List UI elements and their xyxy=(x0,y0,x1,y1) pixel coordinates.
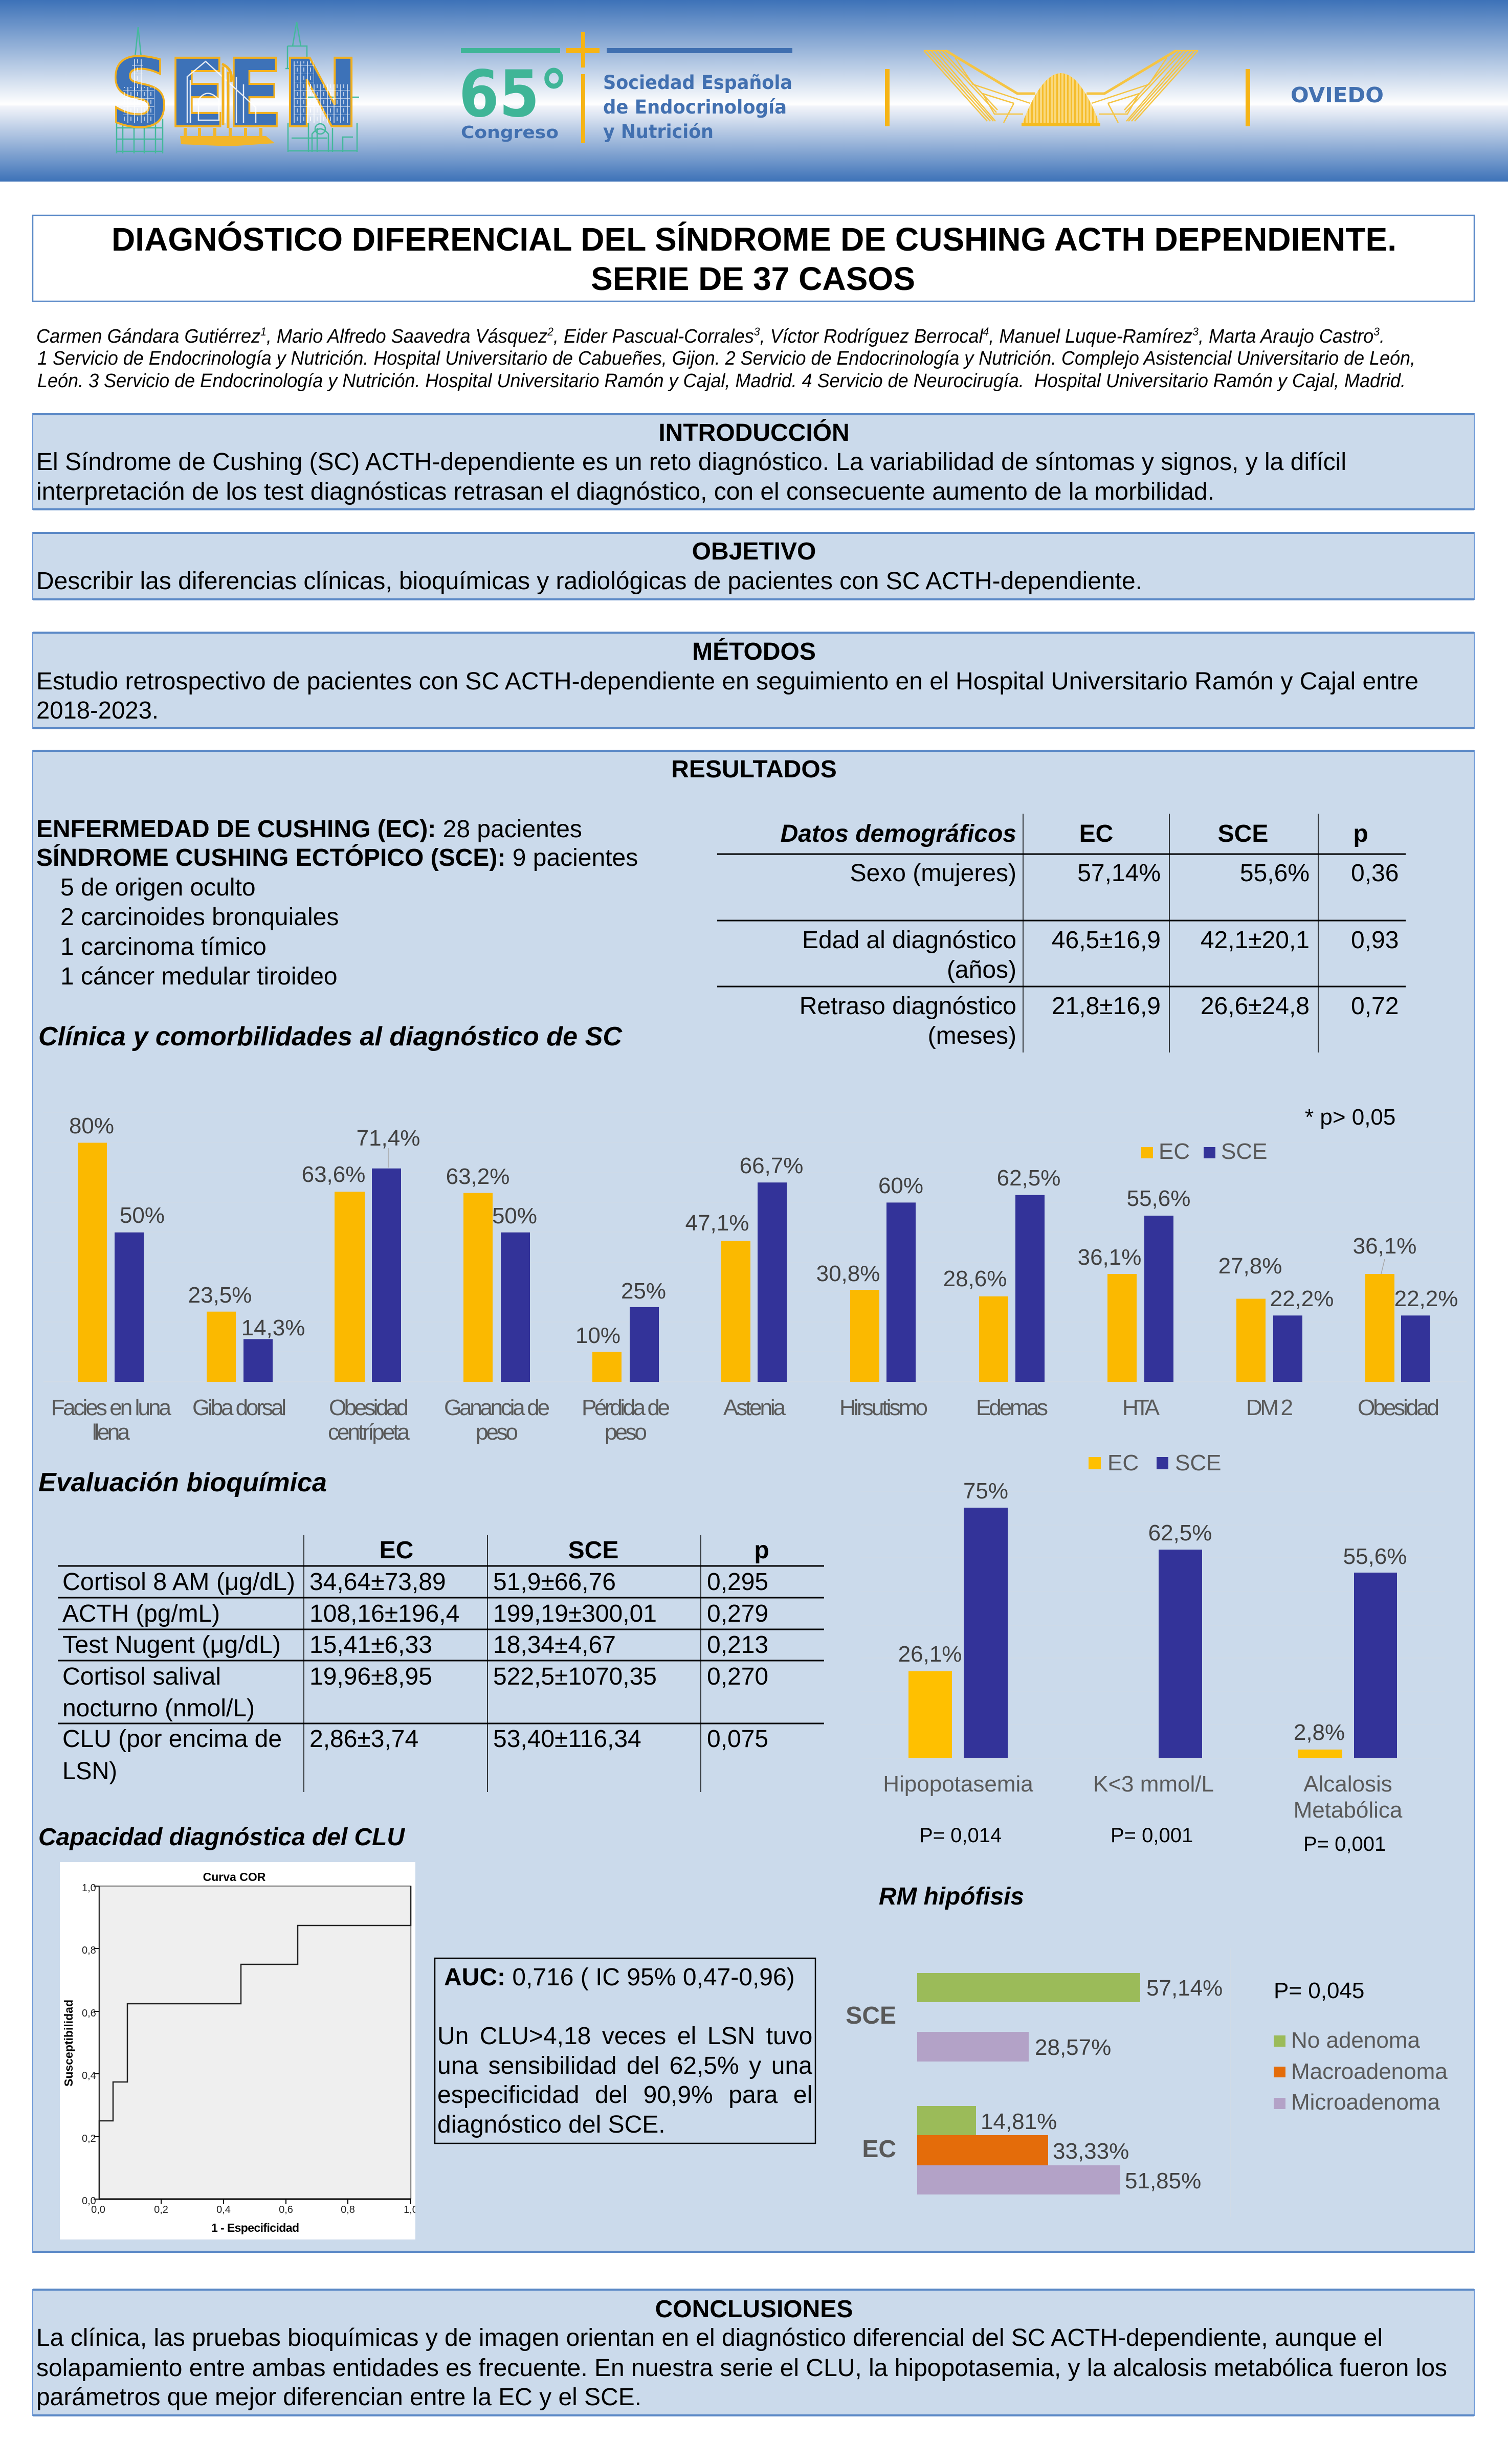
data labels: 27,8% xyxy=(1218,1253,1282,1279)
text block: patient groups: 1 carcinoma tímico xyxy=(60,933,267,960)
table: evaluación bioquímica: ACTH (pg/mL) xyxy=(62,1600,220,1627)
table: datos demográficos: 0,72 xyxy=(1351,993,1399,1020)
bar chart: RM hipófisis: 33,33% xyxy=(1053,2139,1129,2164)
bar chart: RM hipófisis: 51,85% xyxy=(1125,2168,1201,2193)
panel: conclusiones: CONCLUSIONES xyxy=(655,2296,853,2323)
table: evaluación bioquímica: p xyxy=(754,1537,769,1564)
title box: SERIE DE 37 CASOS xyxy=(591,260,915,297)
data labels: 25% xyxy=(621,1279,666,1304)
table: evaluación bioquímica: SCE xyxy=(568,1537,618,1564)
category labels: Facies en luna xyxy=(51,1395,172,1420)
authors and affiliations: , Manuel Luque-Ramírez xyxy=(989,326,1192,347)
p values: P= 0,001 xyxy=(1303,1833,1386,1855)
heading: RM hipófisis: RM hipófisis xyxy=(879,1883,1024,1910)
category labels: Hirsutismo xyxy=(839,1395,928,1420)
table: datos demográficos: 26,6±24,8 xyxy=(1201,993,1310,1020)
table: datos demográficos: 57,14% xyxy=(1077,860,1161,887)
panel: métodos xyxy=(33,632,1474,729)
panel: métodos: 2018-2023. xyxy=(36,697,159,724)
table: evaluación bioquímica: 2,86±3,74 xyxy=(309,1726,418,1753)
data labels: 10% xyxy=(575,1323,620,1348)
panel: métodos: MÉTODOS xyxy=(692,638,816,665)
authors and affiliations: 2 xyxy=(547,325,553,338)
logo: Oviedo bridge xyxy=(885,51,1250,126)
table: evaluación bioquímica: 19,96±8,95 xyxy=(309,1663,432,1690)
chart: curva COR xyxy=(60,1862,418,2239)
authors and affiliations: Carmen Gándara Gutiérrez xyxy=(36,326,272,347)
table: evaluación bioquímica: 15,41±6,33 xyxy=(309,1631,432,1659)
table: datos demográficos: 46,5±16,9 xyxy=(1052,927,1161,954)
callout: AUC: especificidad del 90,9% para el xyxy=(437,2081,812,2109)
text block: patient groups: 2 carcinoides bronquiales xyxy=(60,904,339,931)
data labels: 55,6% xyxy=(1343,1544,1407,1569)
logo: 65 congreso: Sociedad Española xyxy=(603,72,792,94)
panel: introducción: interpretación de los test diagnósticas retrasan el diagnóstico, con el consecuente aumento de la morbilidad. xyxy=(36,478,1214,505)
panel: conclusiones: solapamiento entre ambas entidades es frecuente. En nuestra serie el CLU, la hipopotasemia, y la alcalosis metabólica fueron los xyxy=(36,2355,1447,2382)
category labels: Alcalosis xyxy=(1303,1772,1392,1797)
data labels: 63,2% xyxy=(446,1164,509,1189)
data labels: 62,5% xyxy=(1148,1520,1212,1545)
logo: 65 congreso xyxy=(459,32,792,143)
category labels xyxy=(883,1772,1403,1823)
text block: patient groups: SÍNDROME CUSHING ECTÓPICO (SCE): 9 pacientes xyxy=(36,843,638,871)
legend: RM: No adenoma xyxy=(1291,2028,1420,2053)
category labels: Astenia xyxy=(723,1395,786,1420)
panel: conclusiones: La clínica, las pruebas bioquímicas y de imagen orientan en el diagnóstico diferencial del SC ACTH-dependiente, aunque el xyxy=(36,2324,1383,2351)
authors and affiliations: , Eider Pascual-Corrales xyxy=(553,326,754,347)
callout: AUC: Un CLU>4,18 veces el LSN tuvo xyxy=(437,2023,812,2050)
table: evaluación bioquímica: Cortisol salival xyxy=(62,1663,221,1690)
chart: curva COR: 0,6 xyxy=(279,2204,293,2215)
data labels: 26,1% xyxy=(898,1642,962,1667)
bar chart: RM hipófisis: 57,14% xyxy=(1146,1976,1223,2001)
table: datos demográficos: EC xyxy=(1079,820,1113,847)
header banner xyxy=(0,0,1508,182)
bar chart: RM hipófisis: SCE xyxy=(846,2002,896,2029)
table: evaluación bioquímica: nocturno (nmol/L) xyxy=(62,1695,255,1722)
panel: objetivo xyxy=(33,532,1474,600)
text block: patient groups: ENFERMEDAD DE CUSHING (EC): 28 pacientes xyxy=(36,816,582,843)
chart: curva COR: Curva COR xyxy=(203,1870,266,1884)
legend: chart 2: SCE xyxy=(1175,1450,1221,1475)
authors and affiliations: 1 Servicio de Endocrinología y Nutrición. Hospital Universitario de Cabueñes, Gijon. 2 Servicio de Endocrinología y Nutrición. Complejo Asistencial Universitario de León, xyxy=(37,348,1415,369)
bar chart: RM hipófisis: 28,57% xyxy=(1035,2035,1111,2060)
data labels: 22,2% xyxy=(1270,1286,1334,1311)
title box xyxy=(33,215,1474,301)
logo: SEEN with Oviedo buildings: E xyxy=(226,39,283,149)
panel: conclusiones xyxy=(33,2289,1474,2416)
table: evaluación bioquímica: CLU (por encima de xyxy=(62,1726,282,1753)
category labels: DM 2 xyxy=(1246,1395,1293,1420)
data labels: 62,5% xyxy=(997,1166,1060,1191)
bar chart: RM hipófisis: EC xyxy=(862,2136,896,2163)
category labels: llena xyxy=(92,1420,130,1445)
table: evaluación bioquímica: Test Nugent (μg/dL) xyxy=(62,1631,281,1659)
logo: SEEN with Oviedo buildings: S xyxy=(109,39,170,148)
data labels: 50% xyxy=(492,1203,537,1228)
category labels: HTA xyxy=(1122,1395,1160,1420)
authors and affiliations: 3 xyxy=(1192,325,1199,338)
chart: curva COR: 0,6 xyxy=(82,2008,96,2019)
data labels xyxy=(69,1113,1458,1348)
table: evaluación bioquímica: 0,213 xyxy=(707,1631,768,1659)
table: datos demográficos: (años) xyxy=(947,956,1016,983)
ROC curve xyxy=(99,1886,411,2199)
data labels: 55,6% xyxy=(1127,1186,1190,1211)
data labels: 28,6% xyxy=(943,1266,1007,1291)
data labels: 75% xyxy=(963,1479,1008,1504)
bars: EC xyxy=(908,1671,1342,1758)
logo: 65 congreso: 65° xyxy=(459,56,568,131)
legend: RM: Microadenoma xyxy=(1291,2090,1440,2115)
bar chart: RM hipófisis xyxy=(846,1948,1231,2217)
data labels: 23,5% xyxy=(188,1283,252,1308)
heading: capacidad diagnóstica: Capacidad diagnóstica del CLU xyxy=(38,1824,405,1851)
logo: OVIEDO: OVIEDO xyxy=(1291,83,1384,107)
table: evaluación bioquímica: 53,40±116,34 xyxy=(493,1726,641,1753)
category labels: Edemas xyxy=(976,1395,1048,1420)
chart: curva COR: 1,0 xyxy=(82,1883,96,1894)
text block: patient groups: 1 cáncer medular tiroideo xyxy=(60,963,338,990)
authors and affiliations: 1 xyxy=(260,325,267,338)
chart: curva COR: 0,0 xyxy=(91,2204,105,2215)
bar chart: alteraciones bioquímicas xyxy=(860,1450,1445,1855)
category labels: Ganancia de xyxy=(444,1395,550,1420)
table: datos demográficos: Sexo (mujeres) xyxy=(850,860,1016,887)
chart: curva COR: 0,2 xyxy=(154,2204,168,2215)
authors and affiliations: 3 xyxy=(754,325,760,338)
logo: SEEN with Oviedo buildings xyxy=(109,22,360,153)
authors and affiliations: , Mario Alfredo Saavedra Vásquez xyxy=(267,326,547,347)
bar chart: RM hipófisis: 14,81% xyxy=(981,2109,1057,2134)
table: evaluación bioquímica: 18,34±4,67 xyxy=(493,1631,616,1659)
table: evaluación bioquímica: EC xyxy=(380,1537,413,1564)
authors and affiliations: 4 xyxy=(983,325,989,338)
p value: RM: P= 0,045 xyxy=(1274,1978,1364,2003)
category labels: Metabólica xyxy=(1294,1798,1403,1823)
category labels: centrípeta xyxy=(328,1420,410,1445)
callout: AUC: diagnóstico del SCE. xyxy=(437,2111,666,2138)
data labels: 50% xyxy=(120,1203,165,1228)
panel: conclusiones: parámetros que mejor diferencian entre la EC y el SCE. xyxy=(36,2384,641,2411)
chart: curva COR: 1 - Especificidad xyxy=(211,2221,299,2234)
category labels: peso xyxy=(605,1420,647,1445)
logo: SEEN with Oviedo buildings: N xyxy=(281,39,360,149)
panel: métodos: Estudio retrospectivo de pacientes con SC ACTH-dependiente en seguimiento en el Hospital Universitario Ramón y Cajal entre xyxy=(36,668,1418,695)
table: datos demográficos: Datos demográficos xyxy=(781,820,1016,847)
bar chart: clínica y comorbilidades xyxy=(43,1105,1467,1445)
authors and affiliations xyxy=(36,325,1415,392)
table: datos demográficos: 55,6% xyxy=(1240,860,1310,887)
data labels: 80% xyxy=(69,1113,114,1138)
table: datos demográficos xyxy=(717,814,1406,1052)
table: evaluación bioquímica: 199,19±300,01 xyxy=(493,1600,657,1627)
logo: 65 congreso: y Nutrición xyxy=(603,121,714,143)
text block: patient groups xyxy=(36,816,638,990)
callout: AUC xyxy=(435,1958,815,2143)
authors and affiliations: León. 3 Servicio de Endocrinología y Nutrición. Hospital Universitario Ramón y Cajal, Madrid. 4 Servicio de Neurocirugía. Hospital Universitario Ramón y Cajal, Madrid. xyxy=(37,370,1406,392)
panel: resultados xyxy=(33,750,1474,2253)
p values xyxy=(919,1824,1386,1855)
category labels xyxy=(51,1395,1439,1445)
table: evaluación bioquímica: Cortisol 8 AM (μg/dL) xyxy=(62,1569,295,1596)
chart: curva COR: 0,4 xyxy=(216,2204,231,2215)
chart: curva COR: 0,8 xyxy=(341,2204,355,2215)
panel: objetivo: OBJETIVO xyxy=(692,538,816,565)
panel: objetivo: Describir las diferencias clínicas, bioquímicas y radiológicas de pacientes con SC ACTH-dependiente. xyxy=(36,568,1142,595)
logo: 65 congreso: de Endocrinología xyxy=(603,96,787,118)
category labels: Obesidad xyxy=(329,1395,409,1420)
table: evaluación bioquímica: 0,295 xyxy=(707,1569,768,1596)
table: datos demográficos: SCE xyxy=(1218,820,1268,847)
chart: curva COR: 1,0 xyxy=(404,2204,418,2215)
data labels: 47,1% xyxy=(685,1211,749,1236)
data labels: 63,6% xyxy=(302,1162,365,1187)
bars: SCE xyxy=(964,1508,1397,1758)
table: evaluación bioquímica: 108,16±196,4 xyxy=(309,1600,459,1627)
table: evaluación bioquímica: 51,9±66,76 xyxy=(493,1569,616,1596)
p values: P= 0,014 xyxy=(919,1824,1002,1847)
bars: SCE xyxy=(115,1169,1430,1382)
table: datos demográficos: Edad al diagnóstico xyxy=(802,927,1016,954)
chart: curva COR: 0,2 xyxy=(82,2133,96,2144)
heading: resultados: RESULTADOS xyxy=(671,756,837,783)
bars: EC xyxy=(78,1143,1394,1382)
legend: RM: Macroadenoma xyxy=(1291,2059,1448,2084)
table: datos demográficos: (meses) xyxy=(928,1022,1016,1049)
heading: clínica y comorbilidades: Clínica y comorbilidades al diagnóstico de SC xyxy=(38,1022,623,1051)
table: evaluación bioquímica: 34,64±73,89 xyxy=(309,1569,446,1596)
table: datos demográficos: 0,36 xyxy=(1351,860,1399,887)
callout: AUC: AUC: 0,716 ( IC 95% 0,47-0,96) xyxy=(444,1964,795,1991)
table: datos demográficos: 0,93 xyxy=(1351,927,1399,954)
category labels: Hipopotasemia xyxy=(883,1772,1033,1797)
panel: introducción: El Síndrome de Cushing (SC) ACTH-dependiente es un reto diagnóstico. La variabilidad de síntomas y signos, y la difícil xyxy=(36,449,1346,476)
data labels: 2,8% xyxy=(1294,1720,1345,1745)
table: evaluación bioquímica: 0,075 xyxy=(707,1726,768,1753)
panel: introducción xyxy=(33,413,1474,510)
table: datos demográficos: Retraso diagnóstico xyxy=(800,993,1016,1020)
legend: chart 2: EC xyxy=(1107,1450,1139,1475)
text block: patient groups: 5 de origen oculto xyxy=(60,874,256,901)
data labels: 36,1% xyxy=(1353,1234,1416,1259)
data labels: 36,1% xyxy=(1078,1245,1141,1270)
table: evaluación bioquímica: 522,5±1070,35 xyxy=(493,1663,657,1690)
note: p value: * p> 0,05 xyxy=(1305,1105,1395,1130)
logo: 65 congreso: Congreso xyxy=(461,122,559,142)
authors and affiliations: . xyxy=(1380,326,1385,347)
chart: curva COR: 0,8 xyxy=(82,1945,96,1956)
table: datos demográficos: 42,1±20,1 xyxy=(1201,927,1310,954)
category labels: peso xyxy=(476,1420,518,1445)
legend: chart 1: SCE xyxy=(1221,1139,1267,1164)
data labels xyxy=(898,1479,1407,1745)
authors and affiliations: 3 xyxy=(1373,325,1380,338)
data labels: 60% xyxy=(878,1173,923,1198)
data labels: 14,3% xyxy=(241,1315,305,1340)
authors and affiliations: , Marta Araujo Castro xyxy=(1199,326,1373,347)
p values: P= 0,001 xyxy=(1111,1824,1193,1847)
chart: curva COR: 0,0 xyxy=(82,2196,96,2207)
legend: chart 1: EC xyxy=(1159,1139,1190,1164)
table: datos demográficos: p xyxy=(1353,820,1368,847)
table: evaluación bioquímica: 0,279 xyxy=(707,1600,768,1627)
panel: introducción: INTRODUCCIÓN xyxy=(658,418,850,446)
table: evaluación bioquímica: LSN) xyxy=(62,1758,117,1785)
chart: curva COR: Susceptibilidad xyxy=(62,2000,75,2087)
data labels: 71,4% xyxy=(357,1126,420,1151)
table: evaluación bioquímica xyxy=(58,1535,824,1792)
legend: chart 2 xyxy=(1089,1450,1221,1475)
data labels: 30,8% xyxy=(816,1261,880,1286)
table: evaluación bioquímica: 0,270 xyxy=(707,1663,768,1690)
category labels: Obesidad xyxy=(1358,1395,1439,1420)
chart: curva COR: 0,4 xyxy=(82,2070,96,2081)
category labels: Giba dorsal xyxy=(192,1395,286,1420)
legend: RM xyxy=(1274,2028,1448,2115)
logo: SEEN with Oviedo buildings: E xyxy=(168,39,227,149)
table: datos demográficos: 21,8±16,9 xyxy=(1052,993,1161,1020)
category labels: K<3 mmol/L xyxy=(1093,1772,1214,1797)
data labels: 22,2% xyxy=(1394,1286,1458,1311)
data labels: 66,7% xyxy=(740,1153,803,1178)
heading: evaluación bioquímica: Evaluación bioquímica xyxy=(38,1468,327,1497)
legend: chart 1 xyxy=(1141,1139,1267,1164)
title box: DIAGNÓSTICO DIFERENCIAL DEL SÍNDROME DE CUSHING ACTH DEPENDIENTE. xyxy=(112,221,1396,258)
callout: AUC: una sensibilidad del 62,5% y una xyxy=(437,2052,812,2079)
category labels: Pérdida de xyxy=(582,1395,670,1420)
authors and affiliations: , Víctor Rodríguez Berrocal xyxy=(760,326,984,347)
